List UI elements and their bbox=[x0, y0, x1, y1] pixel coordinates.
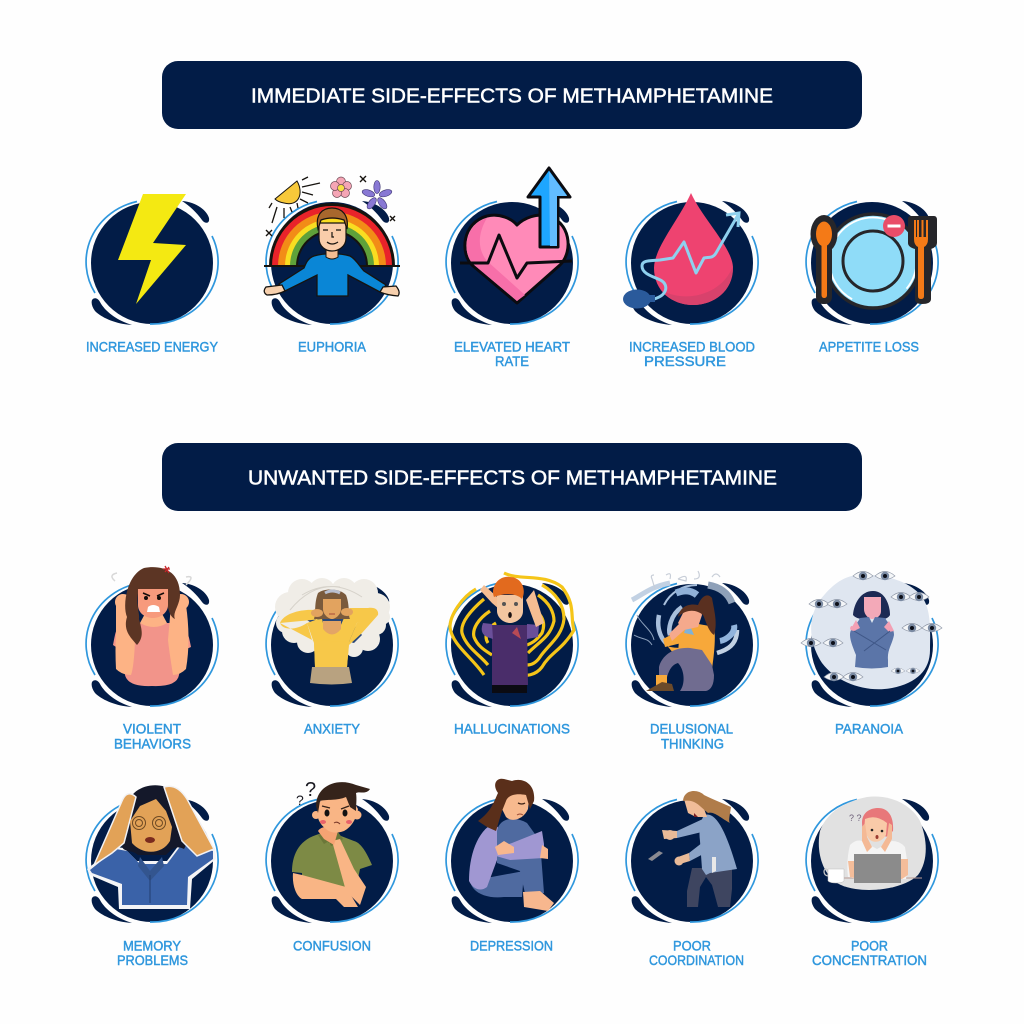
icon: heart with pulse and arrow bbox=[446, 168, 578, 325]
label: poor coordination bbox=[649, 938, 744, 968]
icon: plate with spoon and fork bbox=[806, 201, 938, 325]
item: delusional thinking bbox=[626, 571, 758, 752]
icon: woman in a cloud of worry bbox=[266, 578, 398, 707]
item: depression bbox=[446, 779, 578, 954]
label: elevated heart rate bbox=[454, 340, 571, 369]
icon: woman at laptop: ? ? bbox=[849, 813, 862, 823]
item: elevated heart rate bbox=[446, 168, 578, 369]
label: delusional thinking: THINKING bbox=[661, 736, 724, 752]
icon: man under a rainbow bbox=[264, 176, 400, 325]
label: euphoria: EUPHORIA bbox=[298, 340, 367, 354]
icon: lightning bolt bbox=[86, 194, 218, 325]
question mark: ? bbox=[296, 792, 304, 808]
icon: woman at laptop bbox=[806, 797, 938, 923]
item: poor concentration bbox=[806, 797, 938, 968]
label: elevated heart rate: ELEVATED HEART bbox=[454, 340, 571, 354]
label: violent behaviors: VIOLENT bbox=[123, 722, 182, 736]
label: delusional thinking: DELUSIONAL bbox=[650, 722, 733, 736]
heading: unwanted side-effects bbox=[162, 443, 862, 511]
label: memory problems: PROBLEMS bbox=[117, 953, 188, 968]
label: violent behaviors bbox=[114, 722, 191, 752]
label: hallucinations: HALLUCINATIONS bbox=[454, 722, 570, 736]
item: appetite loss bbox=[806, 201, 938, 354]
icon: blood drop with gauge line bbox=[623, 193, 758, 325]
label: appetite loss: APPETITE LOSS bbox=[819, 340, 919, 354]
label: anxiety: ANXIETY bbox=[304, 722, 360, 736]
icon: man thinking: ? bbox=[305, 779, 316, 801]
icon: sad woman hugging knees bbox=[446, 779, 578, 923]
item: increased energy bbox=[86, 194, 218, 354]
label: increased blood pressure: PRESSURE bbox=[644, 354, 726, 369]
icon: man thinking bbox=[266, 779, 398, 923]
item: increased blood pressure bbox=[623, 193, 758, 369]
label: memory problems bbox=[117, 938, 188, 968]
icon: woman dropping phone bbox=[626, 791, 758, 923]
label: poor concentration bbox=[812, 938, 927, 968]
label: paranoia: PARANOIA bbox=[835, 722, 904, 736]
item: hallucinations bbox=[446, 573, 578, 736]
icon: person with yellow waves bbox=[446, 573, 578, 707]
icon: woman surrounded by eyes bbox=[801, 572, 942, 707]
label: poor coordination: COORDINATION bbox=[649, 953, 744, 968]
label: delusional thinking bbox=[650, 722, 733, 752]
icon: woman with swirling thoughts bbox=[626, 571, 758, 707]
label: increased energy: INCREASED ENERGY bbox=[86, 340, 218, 354]
label: poor coordination: POOR bbox=[673, 938, 711, 954]
item: violent behaviors bbox=[86, 566, 218, 752]
label: increased blood pressure bbox=[629, 340, 755, 369]
label: poor concentration: CONCENTRATION bbox=[812, 953, 927, 968]
label: confusion: CONFUSION bbox=[293, 938, 371, 954]
label: poor concentration: POOR bbox=[851, 938, 888, 954]
label: memory problems: MEMORY bbox=[123, 938, 181, 954]
heading: immediate side-effects bbox=[162, 61, 862, 129]
icon: angry woman bbox=[86, 566, 218, 707]
label: depression: DEPRESSION bbox=[470, 938, 553, 954]
heading: unwanted side-effects: UNWANTED SIDE-EFFECTS OF METHAMPHETAMINE bbox=[248, 468, 777, 490]
label: increased blood pressure: INCREASED BLOOD bbox=[629, 340, 755, 354]
icon: dizzy woman bbox=[86, 785, 218, 923]
label: elevated heart rate: RATE bbox=[495, 354, 529, 369]
item: memory problems bbox=[86, 785, 218, 968]
item: poor coordination bbox=[626, 791, 758, 968]
item: confusion bbox=[266, 779, 398, 954]
heading: immediate side-effects: IMMEDIATE SIDE-EFFECTS OF METHAMPHETAMINE bbox=[251, 86, 773, 108]
item: paranoia bbox=[801, 572, 942, 736]
item: euphoria bbox=[264, 176, 400, 354]
label: violent behaviors: BEHAVIORS bbox=[114, 736, 191, 752]
item: anxiety bbox=[266, 578, 398, 736]
